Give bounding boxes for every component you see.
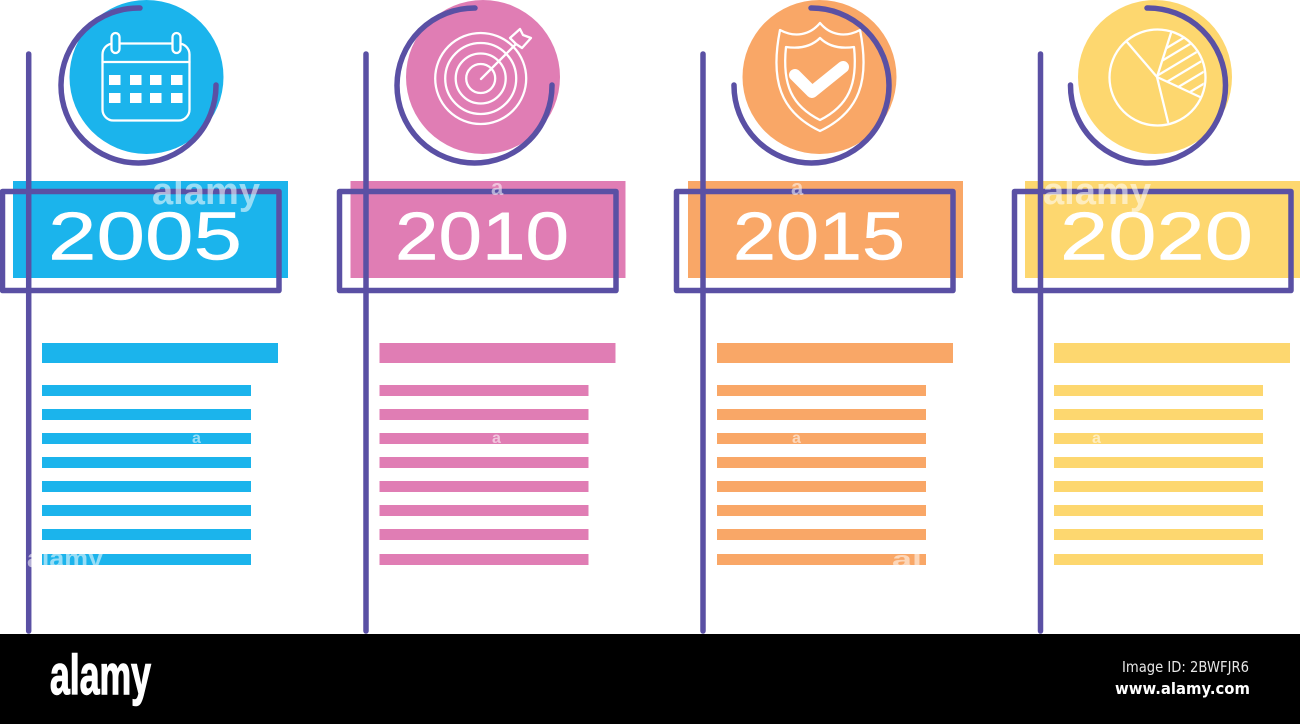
text lines	[717, 385, 926, 565]
watermarks: a	[192, 430, 201, 447]
footer bar	[0, 634, 1300, 724]
vertical line	[700, 54, 706, 631]
watermarks: al	[892, 547, 922, 572]
heading bar	[380, 343, 616, 363]
year band 2005	[2, 181, 288, 290]
icon: pie chart in yellow circle	[1078, 0, 1235, 154]
watermarks: a	[792, 430, 801, 447]
year band 2020: 2020	[1060, 198, 1253, 274]
watermarks: alamy	[1043, 171, 1151, 213]
panel: 2020	[1014, 0, 1300, 631]
heading bar	[42, 343, 278, 363]
image id: Image ID: 2BWFJR6	[1122, 658, 1249, 676]
ring arc	[734, 8, 889, 163]
watermarks: alamy	[152, 171, 260, 213]
year band 2010: 2010	[395, 198, 569, 274]
watermarks: alamy	[27, 543, 104, 573]
icon: shield in orange circle	[742, 0, 896, 154]
panel: 2010	[340, 0, 626, 631]
year band 2015: 2015	[733, 198, 905, 274]
icon: calendar in blue circle	[70, 0, 224, 154]
year band 2010	[340, 181, 626, 290]
year band 2015	[676, 181, 963, 290]
heading bar	[1054, 343, 1290, 363]
vertical line	[1038, 54, 1043, 631]
year band 2005: 2005	[48, 198, 242, 274]
website: www.alamy.com	[1115, 679, 1250, 698]
alamy logo: alamy	[50, 643, 151, 706]
watermarks: a	[491, 175, 504, 200]
vertical line	[363, 54, 369, 631]
icon: target in pink circle	[406, 0, 560, 154]
text lines	[1054, 385, 1263, 565]
ring arc	[61, 8, 216, 163]
watermarks: a	[492, 430, 501, 447]
vertical line	[26, 54, 31, 631]
watermarks: a	[1092, 430, 1101, 447]
text lines	[42, 385, 251, 565]
text lines	[380, 385, 588, 565]
watermarks	[27, 171, 1151, 573]
panel: 2005	[2, 0, 288, 631]
ring arc	[1070, 8, 1225, 163]
year band 2020	[1014, 181, 1300, 290]
panel: 2015	[676, 0, 963, 631]
watermarks: a	[791, 175, 804, 200]
heading bar	[717, 343, 953, 363]
ring arc	[397, 8, 552, 163]
